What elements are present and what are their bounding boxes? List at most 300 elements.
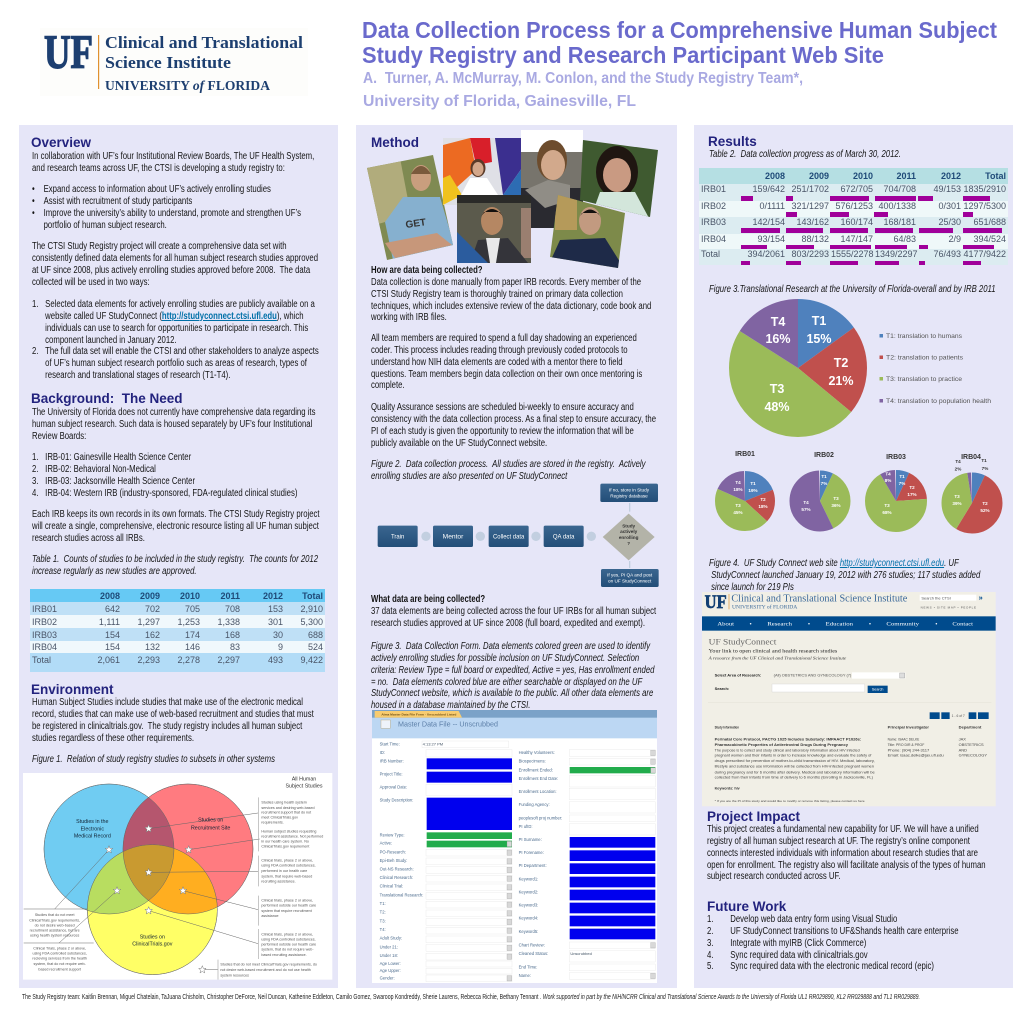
table 2: data collection progress: 168/181 bbox=[883, 217, 916, 227]
screenshot: data collection form: T2: bbox=[379, 910, 385, 915]
heading: Future Work: Future Work bbox=[707, 899, 786, 914]
pie: IRB02 bbox=[801, 452, 841, 516]
screenshot: UF StudyConnect web site: Pharmacokinetic Properties of Antiretroviral Drugs During Pregnancy bbox=[715, 742, 849, 747]
screenshot: data collection form: Keyword5: bbox=[518, 929, 538, 934]
venn diagram: study subsets: Studies that do not meet bbox=[35, 913, 75, 917]
table 1: study counts: Total bbox=[32, 655, 51, 665]
heading: Overview: Overview bbox=[31, 135, 91, 150]
venn diagram: study subsets: do not desire web-based bbox=[35, 924, 75, 928]
screenshot: data collection form: Chart Review: bbox=[518, 942, 544, 947]
pie: IRB03: T3 bbox=[884, 503, 890, 508]
pie: IRB03: 7% bbox=[899, 481, 905, 486]
screenshot: data collection form: Under 18: bbox=[379, 953, 398, 958]
venn diagram: study subsets: Subject Studies bbox=[286, 784, 323, 790]
heading: Environment: Environment bbox=[31, 682, 114, 697]
screenshot: UF StudyConnect web site: Email: isaac.delke@jax.ufl.edu bbox=[888, 753, 944, 758]
table 1: study counts: 702 bbox=[145, 604, 160, 614]
pie chart: translational research overall: T2 bbox=[834, 356, 848, 370]
pie: IRB04: T4 bbox=[955, 459, 961, 464]
screenshot: UF StudyConnect web site: AND bbox=[959, 748, 968, 753]
venn diagram: study subsets: recruitment support that do not bbox=[262, 811, 311, 815]
screenshot: data collection form: PI Surname: bbox=[518, 837, 541, 842]
screenshot: data collection form: Keyword3: bbox=[518, 903, 538, 908]
screenshot: UF StudyConnect web site: Search bbox=[872, 688, 884, 692]
photo: team member 5 bbox=[457, 195, 531, 263]
caption: figure 4: Figure 4. UF Study Connect web site http://studyconnect.ctsi.ufl.edu. UF StudyConnect launched January 19, 2012 with 276 studies; 117 studies added since launch for 219 PIs bbox=[709, 558, 980, 593]
text: how data are collected: How are data being collected? Data collection is done manually from paper IRB records. Every member of the CTSI Study Registry team is thoroughly trained on primary data collection techniques, which includes extensive review of the data dictionary, code book and working with IRB files. bbox=[371, 265, 651, 323]
flowchart: data collection process: If yes, PI QA and post bbox=[607, 573, 653, 578]
screenshot: UF StudyConnect web site: • bbox=[869, 622, 871, 628]
list: future work: Develop web data entry form using Visual Studio UF StudyConnect transitions to UF&Shands health care enterprise Integrate with myIRB (Click Commerce) Sync required data with clinicaltrials.gov Sync required data with the electronic medical record (epic) bbox=[730, 914, 959, 972]
venn diagram: study subsets: performed outside our health care bbox=[262, 943, 317, 947]
table 2: data collection progress: 2/9 bbox=[948, 234, 961, 244]
screenshot: data collection form: T4: bbox=[379, 927, 385, 932]
screenshot: data collection form: PI ufID: bbox=[518, 824, 532, 829]
title bbox=[362, 17, 997, 68]
screenshot: UF StudyConnect web site: (All) OBSTETRICS AND GYNECOLOGY (7) bbox=[774, 674, 852, 678]
table 1: study counts: 493 bbox=[268, 655, 283, 665]
table 2: data collection progress bbox=[699, 168, 1008, 265]
photo collage: study registry team bbox=[367, 130, 658, 268]
pie: IRB02: 57% bbox=[801, 507, 811, 512]
venn diagram: study subsets: Clinical Trials, phase 2 or above, bbox=[34, 947, 86, 951]
pie: IRB03: T2 bbox=[909, 485, 915, 490]
table 1: study counts: 2008 bbox=[100, 590, 120, 600]
table 2: data collection progress: 0/301 bbox=[938, 201, 961, 211]
screenshot: UF StudyConnect web site: • bbox=[808, 622, 810, 628]
photo: team member 4 bbox=[580, 140, 658, 217]
screenshot: UF StudyConnect web site: Search the CTSI bbox=[922, 596, 951, 601]
venn diagram: study subsets: recieving services from the health bbox=[33, 957, 87, 961]
screenshot: data collection form: Enrollment Location: bbox=[518, 789, 556, 794]
venn diagram: study subsets: requirements. bbox=[262, 821, 284, 825]
table 1: study counts: 1,338 bbox=[217, 616, 240, 626]
list: review boards: 2. bbox=[32, 464, 38, 475]
screenshot: UF StudyConnect web site: Study Information bbox=[715, 725, 740, 730]
pie: IRB01: T2 bbox=[760, 497, 766, 502]
pie: IRB02: IRB02 bbox=[814, 452, 834, 459]
venn diagram: study subsets: Recruitment Site bbox=[191, 826, 231, 832]
venn diagram: study subsets: recruitment assistance. Not performed bbox=[262, 835, 324, 839]
table 1: study counts: 5,300 bbox=[300, 616, 323, 626]
venn diagram: study subsets: using health system resources bbox=[30, 934, 80, 938]
venn diagram: study subsets: system, that do not require web- bbox=[34, 962, 87, 966]
screenshot: UF StudyConnect web site: JAX bbox=[959, 737, 967, 742]
table 2: data collection progress: 400/1338 bbox=[878, 201, 916, 211]
pie: IRB01: 18% bbox=[733, 487, 743, 492]
pie chart: translational research overall: T2: translation to patients bbox=[886, 356, 963, 362]
table 1: study counts: 153 bbox=[268, 604, 283, 614]
screenshot: data collection form: T3: bbox=[379, 918, 385, 923]
table 1: study counts: 83 bbox=[230, 642, 240, 652]
screenshot: data collection form: Epi-Beh Study: bbox=[379, 858, 407, 863]
screenshot: data collection form: Age Lower: bbox=[379, 961, 400, 966]
screenshot: data collection form: Review Type: bbox=[379, 832, 404, 837]
pie: IRB04: 7% bbox=[982, 466, 988, 471]
table 2: data collection progress: IRB01 bbox=[701, 184, 726, 194]
screenshot: data collection form: Enrollment End Date: bbox=[518, 776, 558, 781]
heading: Method: Method bbox=[371, 135, 419, 150]
screenshot: data collection form: Keyword2: bbox=[518, 890, 538, 895]
list: review boards: 4. bbox=[32, 488, 38, 499]
pie: IRB04: IRB04 bbox=[961, 454, 981, 461]
pie: IRB01: 45% bbox=[733, 510, 743, 515]
pie: IRB02: T3 bbox=[833, 496, 839, 501]
pie chart: translational research overall: 16% bbox=[765, 332, 791, 346]
panel: left column bbox=[19, 125, 338, 988]
caption: figure 3 form: Figure 3. Data Collection Form. Data elements colored green are used to identify actively enrolling studies for possible inclusion on UF StudyConnect. Selection criteria: Review Type = full board or expedited, Active = yes, Has enrollment ended = no. Data elements colored blue are either searchable or displayed on the UF StudyConnect website, which is available to the public. All other data elements are housed in a database maintained by the CTSI. bbox=[371, 641, 654, 711]
table 2: data collection progress: 2012 bbox=[941, 171, 961, 181]
table 1: study counts: 154 bbox=[105, 630, 120, 640]
screenshot: UF StudyConnect web site: collected from their infants from time of delivery to 6 months (Enrolling in Jacksonville, FL) bbox=[715, 775, 874, 780]
screenshot: UF StudyConnect web site: NEWS • SITE MAP • PEOPLE bbox=[921, 606, 976, 610]
table 1: study counts: Total bbox=[302, 590, 323, 600]
flowchart: data collection process: QA data bbox=[552, 534, 574, 541]
venn diagram: study subsets: system, that do not require web- bbox=[262, 948, 315, 952]
pie chart: translational research overall: 15% bbox=[806, 332, 832, 346]
table 2: data collection progress: IRB04 bbox=[701, 234, 726, 244]
venn diagram: study subsets: Electronic bbox=[81, 827, 105, 833]
pie: IRB01: T1 bbox=[750, 481, 756, 486]
table 2: data collection progress: 394/524 bbox=[973, 234, 1006, 244]
venn diagram: study subsets: Clinical trials, phase 2 or above, bbox=[262, 859, 313, 863]
pie: IRB04: T1 bbox=[981, 458, 987, 463]
screenshot: UF StudyConnect web site: Search: bbox=[715, 686, 730, 691]
pie chart: translational research overall: T1: translation to humans bbox=[886, 334, 962, 340]
table 2: data collection progress: 576/1253 bbox=[835, 201, 873, 211]
screenshot: UF StudyConnect web site: Community bbox=[887, 622, 920, 628]
logo: UF Clinical and Translational Science Institute bbox=[44, 28, 303, 94]
pie chart: translational research overall: T4: translation to population health bbox=[886, 399, 991, 405]
flowchart: data collection process: Train bbox=[391, 534, 404, 541]
venn diagram: study subsets: All Human bbox=[292, 777, 317, 783]
table 1: study counts bbox=[30, 589, 325, 672]
text: quality assurance: Quality Assurance sessions are scheduled bi-weekly to ensure accuracy and consistency with the data collection process. As a final step to ensure accuracy, the PI of each study is given the opportunity to review the information that will be publicly available on the UF StudyConnect website. bbox=[371, 402, 656, 449]
venn diagram: study subsets: Studies on bbox=[140, 935, 165, 941]
pie: IRB03: 8% bbox=[885, 478, 891, 483]
screenshot: UF StudyConnect web site: Perinatal Core Protocol, PACTG 1025 Includes Substudy: IMPAACT P1026s: bbox=[715, 737, 862, 742]
list: future work: 2. bbox=[707, 926, 713, 937]
screenshot: UF StudyConnect web site: 1 - 6 of 7 bbox=[952, 714, 965, 718]
table 1: study counts: 688 bbox=[308, 630, 323, 640]
table 2: data collection progress: 160/174 bbox=[840, 217, 873, 227]
text: overview intro: In collaboration with UF’s four Institutional Review Boards, The UF Health System, and research teams across UF, the CTSI is developing a study registry to: bbox=[32, 151, 314, 174]
screenshot: data collection form: Biospecimens: bbox=[518, 759, 545, 764]
table 1: study counts: IRB02 bbox=[32, 616, 57, 626]
screenshot: data collection form: Keyword1: bbox=[518, 876, 538, 881]
table 1: study counts: 132 bbox=[145, 642, 160, 652]
screenshot: data collection form: Funding Agency: bbox=[518, 802, 549, 807]
screenshot: data collection form: Active: bbox=[379, 841, 392, 846]
screenshot: UF StudyConnect web site: • bbox=[936, 622, 938, 628]
table 1: study counts: 524 bbox=[308, 642, 323, 652]
pie: IRB03 bbox=[880, 454, 917, 516]
text: project description: The CTSI Study Registry project will create a comprehensive data set with consistently defined data elements for all human subject research studies approved at UF since 2008, plus actively enrolling studies approved before 2008. The data collected will be used in two ways: bbox=[32, 241, 318, 288]
screenshot: data collection form: Translational Research: bbox=[379, 892, 423, 897]
pie chart: translational research overall: T3: translation to practice bbox=[886, 377, 963, 383]
venn diagram: study subsets: ClinicalTrials.gov requirement bbox=[262, 845, 310, 849]
pie: IRB02: T1 bbox=[821, 474, 827, 479]
table 2: data collection progress: 2011 bbox=[896, 171, 916, 181]
venn diagram: study subsets: Medical Record bbox=[74, 834, 111, 840]
table 2: data collection progress: 142/154 bbox=[752, 217, 785, 227]
table 1: study counts: 1,253 bbox=[177, 616, 200, 626]
table 2: data collection progress: Total bbox=[701, 249, 720, 259]
table 1: study counts: 174 bbox=[185, 630, 200, 640]
flowchart: data collection process: Mentor bbox=[442, 534, 464, 541]
list: future work: 1. bbox=[707, 914, 713, 925]
text: team training: All team members are required to spend a full day shadowing an experienced coder. This process includes reading through previously coded protocols to understand how NIH data elements are coded with a mentor there to field questions. Team members begin data collection on their own once mentoring is complete. bbox=[371, 333, 642, 391]
screenshot: UF StudyConnect web site: Phone: (904) 244-3117 bbox=[888, 748, 930, 753]
screenshot: UF StudyConnect web site: » bbox=[979, 593, 983, 602]
list: future work: 5. bbox=[707, 961, 713, 972]
photo: team member 2 bbox=[443, 138, 522, 205]
table 2: data collection progress: 803/2293 bbox=[791, 249, 829, 259]
pie: IRB03: 68% bbox=[882, 510, 892, 515]
heading: Background: Background: The Need bbox=[31, 391, 183, 406]
table 2: data collection progress: 321/1297 bbox=[791, 201, 829, 211]
authors: University of Florida, Gainesville, FL bbox=[363, 93, 636, 110]
table 2: data collection progress: 394/2061 bbox=[747, 249, 785, 259]
table 2: data collection progress: IRB02 bbox=[701, 201, 726, 211]
screenshot: UF StudyConnect web site bbox=[702, 592, 996, 806]
pie chart: translational research overall bbox=[729, 299, 991, 437]
pie charts: translational research by IRB bbox=[715, 451, 1002, 534]
table 2: data collection progress: 147/147 bbox=[840, 234, 873, 244]
screenshot: UF StudyConnect web site: Select Area of Research: bbox=[715, 673, 762, 678]
table 1: study counts: 2,278 bbox=[177, 655, 200, 665]
pie: IRB04: 39% bbox=[952, 501, 962, 506]
table 2: data collection progress: 0/1111 bbox=[759, 201, 785, 211]
photo: team member 1: GET bbox=[405, 217, 427, 231]
screenshot: data collection form: Study Description: bbox=[379, 798, 413, 803]
venn diagram: study subsets: performed in our health care bbox=[262, 869, 308, 873]
table 1: study counts: 154 bbox=[105, 642, 120, 652]
screenshot: UF StudyConnect web site: Keywords: hiv bbox=[715, 786, 741, 791]
form fields bbox=[422, 741, 655, 982]
screenshot: data collection form: PI Department: bbox=[518, 863, 546, 868]
screenshot: data collection form: Adult Study: bbox=[379, 936, 402, 941]
table 1: study counts: IRB03 bbox=[32, 630, 57, 640]
list: review boards: 3. bbox=[32, 476, 38, 487]
table 1: study counts: 301 bbox=[268, 616, 283, 626]
list: two ways data are used: 1. bbox=[32, 299, 38, 310]
screenshot: UF StudyConnect web site: • bbox=[750, 622, 752, 628]
list: two ways data are used: Selected data elements for actively enrolling studies are publicly available on a website called UF StudyConnect (http://studyconnect.ctsi.ufl.edu), which individuals can use to search for opportunities to participate in research. This component launched in January 2012. The full data set will enable the CTSI and other stakeholders to analyze aspects of UF’s human subject research portfolio such as areas of research, types of research and translational stages of research (T1-T4). bbox=[45, 299, 319, 381]
table 1: study counts: 30 bbox=[273, 630, 283, 640]
pie: IRB01 bbox=[730, 451, 768, 516]
list: future work: 4. bbox=[707, 950, 713, 961]
table 1: study counts: 2011 bbox=[220, 590, 240, 600]
title: Data Collection Process for a Comprehensive Human Subject bbox=[362, 17, 997, 43]
pie: IRB03: 17% bbox=[907, 492, 917, 497]
screenshot: data collection form: Start Time: bbox=[379, 741, 399, 746]
screenshot: data collection form: End Time: bbox=[518, 964, 537, 969]
screenshot: UF StudyConnect web site: Title: PRO DIR & PROF bbox=[888, 742, 925, 747]
venn diagram: study subsets: using FDA controlled substances, bbox=[262, 864, 316, 868]
table 1: study counts: 9 bbox=[278, 642, 283, 652]
table 2: data collection progress: 1835/2910 bbox=[963, 184, 1006, 194]
screenshot: data collection form: PI Forename: bbox=[518, 850, 544, 855]
venn diagram: study subsets: ClinicalTrials.gov requirements, bbox=[30, 919, 80, 923]
screenshot: data collection form: ID: bbox=[379, 750, 385, 755]
screenshot: UF StudyConnect web site: GYNECOLOGY bbox=[959, 753, 988, 758]
venn diagram: study subsets: Clinical trials, phase 2 or above, bbox=[262, 933, 313, 937]
pie: IRB01: 18% bbox=[758, 504, 768, 509]
screenshot: UF StudyConnect web site: UF StudyConnect bbox=[709, 638, 777, 647]
screenshot: UF StudyConnect web site: OBSTETRICS bbox=[959, 742, 984, 747]
screenshot: data collection form: Keyword4: bbox=[518, 916, 538, 921]
pie: IRB04: T3 bbox=[954, 494, 960, 499]
screenshot: UF StudyConnect web site: Name: ISAAC DELKE bbox=[888, 737, 920, 742]
flowchart: data collection process: Study bbox=[622, 524, 635, 529]
venn diagram: study subsets: system, that require web-based bbox=[262, 875, 313, 879]
screenshot: data collection form: Healthy Volunteers: bbox=[518, 750, 554, 755]
screenshot: data collection form: Clinical Trial: bbox=[379, 884, 403, 889]
pie: IRB02: 36% bbox=[831, 503, 841, 508]
pie: IRB03: T4 bbox=[885, 472, 891, 476]
screenshot: UF StudyConnect web site: About bbox=[718, 622, 735, 628]
flowchart: data collection process: enrolling bbox=[618, 535, 638, 540]
screenshot: data collection form: peoplesoft proj number: bbox=[518, 815, 562, 820]
table 1: study counts: IRB04 bbox=[32, 642, 57, 652]
pie: IRB03: T1 bbox=[899, 474, 905, 479]
photo: team member 1 bbox=[367, 155, 453, 260]
photo: team member 3 bbox=[521, 130, 583, 228]
caption: figure 3 pie: Figure 3.Translational Research at the University of Florida-overall and by IRB 2011 bbox=[709, 284, 996, 295]
screenshot: UF StudyConnect web site: UNIVERSITY of FLORIDA bbox=[732, 606, 798, 611]
venn diagram: study subsets: meet ClinicalTrials.gov bbox=[262, 816, 298, 820]
table 2: data collection progress: 64/83 bbox=[893, 234, 916, 244]
screenshot: UF StudyConnect web site: Contact bbox=[953, 622, 974, 628]
table 2: data collection progress: 251/1702 bbox=[791, 184, 829, 194]
screenshot: UF StudyConnect web site: lifestyle and substance use information will be collected from HIV-infected pregnant women bbox=[715, 764, 874, 769]
table 2: data collection progress: 88/132 bbox=[801, 234, 829, 244]
pie: IRB04: T2 bbox=[982, 501, 988, 506]
logo: UF Clinical and Translational Science Institute: Science Institute bbox=[105, 53, 231, 72]
pie: IRB04: 2% bbox=[955, 466, 961, 472]
list: two ways data are used: 2. bbox=[32, 346, 38, 357]
caption: table 1: Table 1. Counts of studies to be included in the study registry. The counts for 2012 increase regularly as new studies are approved. bbox=[32, 554, 318, 577]
text: background: The University of Florida does not currently have comprehensive data regarding its human subject research. Such data is housed separately by UF’s four Institutional Review Boards: bbox=[32, 407, 315, 442]
screenshot: data collection form: IRB Number: bbox=[379, 759, 403, 764]
venn diagram: study subsets: performed outside our health care bbox=[262, 904, 317, 908]
authors bbox=[363, 70, 803, 110]
venn diagram: study subsets: recruitment assistance, but are bbox=[30, 929, 80, 933]
screenshot: data collection form: Master Data File -- Unscrubbed bbox=[398, 722, 498, 729]
table 2: data collection progress: IRB03 bbox=[701, 217, 726, 227]
text: registry plan: Each IRB keeps its own records in its own formats. The CTSI Study Registry project will create a single, comprehensive, electronic resource listing all UF human subject research studies across all IRBs. bbox=[32, 509, 320, 544]
panel: right column bbox=[694, 125, 1013, 988]
pie: IRB01: T3 bbox=[735, 503, 741, 508]
screenshot: UF StudyConnect web site: Education bbox=[826, 622, 854, 628]
table 1: study counts: 2,910 bbox=[300, 604, 323, 614]
table 2: data collection progress: 76/493 bbox=[933, 249, 961, 259]
table 1: study counts: 2009 bbox=[140, 590, 160, 600]
venn diagram: study subsets: assistance bbox=[262, 914, 279, 918]
table 2: data collection progress: 2008 bbox=[765, 171, 785, 181]
table 1: study counts: 2,297 bbox=[217, 655, 240, 665]
pie: IRB03: IRB03 bbox=[886, 454, 906, 461]
pie: IRB02: 7% bbox=[821, 481, 827, 486]
text: project impact: This project creates a fundamental new capability for UF. We will have a unified registry of all human subject research at UF. The registry’s online component connects interested individuals with information about research studies that are open for enrollment. The registry also will facilitate analysis of the types of human subject research conducted across UF. bbox=[707, 824, 986, 882]
table 1: study counts: 642 bbox=[105, 604, 120, 614]
pie: IRB04: 52% bbox=[980, 508, 990, 513]
screenshot: data collection form: Alma Master Data File Form - Unscrubbed Listed bbox=[381, 713, 456, 717]
flowchart: data collection process: Registry database bbox=[610, 494, 648, 499]
title: Study Registry and Research Participant Web Site bbox=[362, 42, 884, 68]
table 1: study counts: 146 bbox=[185, 642, 200, 652]
table 1: study counts: 1,111 bbox=[99, 616, 120, 626]
table 2: data collection progress: 143/162 bbox=[796, 217, 829, 227]
venn diagram: study subsets: Studies that do not meet ClinicalTrials.gov requirements, do bbox=[221, 963, 317, 967]
pie chart: translational research overall: T4 bbox=[771, 315, 785, 329]
venn diagram: study subsets bbox=[23, 773, 332, 980]
list: review boards: IRB-01: Gainesville Health Science Center IRB-02: Behavioral Non-Medical IRB-03: Jacksonville Health Science Center IRB-04: Western IRB (industry-sponsored, FDA-regulated clinical studies) bbox=[45, 452, 297, 499]
list: review boards: 1. bbox=[32, 452, 38, 463]
venn diagram: study subsets: ClinicalTrials.gov bbox=[133, 942, 173, 948]
list: registry goals: Expand access to information about UF’s actively enrolling studies Assist with recruitment of study participants Improve the university’s ability to understand, promote and strengthen UF’s portfolio of human subject research. bbox=[44, 184, 301, 231]
table 1: study counts: 705 bbox=[185, 604, 200, 614]
venn diagram: study subsets: system resources bbox=[221, 974, 249, 978]
table 2: data collection progress: 1555/2278 bbox=[831, 249, 874, 259]
venn diagram: study subsets: based recruiting assistance. bbox=[262, 953, 307, 957]
table 1: study counts: 2,061 bbox=[97, 655, 120, 665]
table 2: data collection progress: 651/688 bbox=[973, 217, 1006, 227]
screenshot: data collection form: Approval Date: bbox=[379, 785, 407, 790]
screenshot: UF StudyConnect web site: * If you are the PI of this study and would like to modify or remove this listing, please contact us here bbox=[715, 799, 865, 803]
table 2: data collection progress: 672/705 bbox=[840, 184, 873, 194]
table 1: study counts: 168 bbox=[225, 630, 240, 640]
table 2: data collection progress: 1349/2297 bbox=[875, 249, 918, 259]
screenshot: data collection form: Gender: bbox=[379, 975, 394, 980]
screenshot: UF StudyConnect web site: during pregnancy and for 6 months after delivery. Medical and laboratory information will be bbox=[715, 770, 876, 775]
table 2: data collection progress: 49/153 bbox=[933, 184, 961, 194]
flowchart: data collection process: actively bbox=[620, 529, 637, 534]
text: what data are collected: What data are being collected? 37 data elements are being collected across the four UF IRBs for all human subject research studies approved at UF since 2008 (full board, expedited and exempt). bbox=[371, 594, 656, 629]
pie: IRB01: 19% bbox=[748, 488, 758, 493]
table 1: study counts: IRB01 bbox=[32, 604, 57, 614]
screenshot: UF StudyConnect web site: Clinical and Translational Science Institute bbox=[732, 594, 908, 605]
screenshot: UF StudyConnect web site: Principal Investigator bbox=[888, 725, 930, 730]
screenshot: data collection form: Out-NS Research: bbox=[379, 867, 413, 872]
table 1: study counts: 9,422 bbox=[300, 655, 323, 665]
venn diagram: study subsets: system that require recruitment bbox=[262, 909, 312, 913]
table 1: study counts: 2010 bbox=[180, 590, 200, 600]
caption: table 2: Table 2. Data collection progress as of March 30, 2012. bbox=[709, 149, 901, 160]
flowchart: data collection process: ? bbox=[627, 541, 630, 546]
photo: team member 6 bbox=[550, 195, 625, 268]
table 1: study counts: 1,297 bbox=[137, 616, 160, 626]
pie: IRB02: T4 bbox=[803, 500, 809, 505]
table 2: data collection progress: 25/30 bbox=[938, 217, 961, 227]
venn diagram: study subsets: using FDA controlled substances, bbox=[262, 938, 316, 942]
venn diagram: study subsets: Studies on bbox=[198, 818, 224, 824]
screenshot: data collection form: Name: bbox=[518, 973, 531, 978]
screenshot: UF StudyConnect web site: A resource from the UF Clinical and Translational Science Institute bbox=[708, 656, 847, 661]
table 1: study counts: 708 bbox=[225, 604, 240, 614]
venn diagram: study subsets: recruiting assistance. bbox=[262, 880, 296, 884]
screenshot: data collection form: Unscrubbed bbox=[570, 951, 591, 956]
table 1: study counts: 2,293 bbox=[137, 655, 160, 665]
screenshot: data collection form: Project Title: bbox=[379, 772, 402, 777]
pie: IRB01: T4 bbox=[735, 480, 741, 485]
heading: Results: Results bbox=[708, 134, 757, 149]
table 2: data collection progress: Total bbox=[985, 171, 1006, 181]
screenshot: UF StudyConnect web site: UF bbox=[705, 592, 727, 613]
logo: UF Clinical and Translational Science Institute: Clinical and Translational bbox=[105, 33, 303, 52]
logo: UF Clinical and Translational Science Institute: UNIVERSITY of FLORIDA bbox=[105, 79, 271, 94]
